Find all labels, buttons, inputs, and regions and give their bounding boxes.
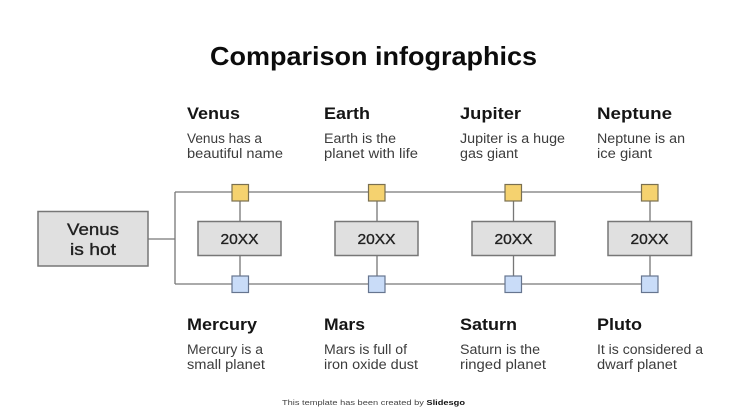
column: Earth: 20XX — [358, 231, 396, 248]
label: Saturn: Saturn is the — [460, 342, 540, 357]
label: Mercury: Mercury — [187, 315, 258, 334]
label: Pluto: It is considered a — [597, 342, 704, 357]
label: Mercury: small planet — [187, 357, 265, 372]
column: Venus: Venus — [187, 104, 240, 123]
column: Neptune: 20XX — [630, 231, 668, 248]
column: Venus: beautiful name — [187, 146, 283, 161]
label: Pluto: dwarf planet — [597, 357, 677, 372]
column: Earth — [324, 104, 418, 292]
label: Mars — [324, 315, 418, 372]
column: Earth: planet with life — [324, 146, 418, 161]
label: Saturn: ringed planet — [460, 357, 546, 372]
label: Mars: Mars — [324, 315, 365, 334]
column: Jupiter: Jupiter — [460, 104, 521, 123]
column: Neptune: Neptune — [597, 104, 672, 123]
title: Comparison infographics — [210, 41, 537, 71]
label: Saturn — [460, 315, 546, 372]
column: Venus — [187, 104, 283, 292]
column: Neptune: ice giant — [597, 146, 652, 161]
column: Neptune — [597, 104, 692, 292]
connector network — [148, 192, 650, 284]
column: Venus: Venus has a — [187, 131, 262, 146]
column: Jupiter: 20XX — [494, 231, 532, 248]
label: Mercury: Mercury is a — [187, 342, 264, 357]
label: Mars: iron oxide dust — [324, 357, 418, 372]
footer credit: This template has been created by Slidesgo — [282, 398, 466, 407]
column: Venus: 20XX — [220, 231, 258, 248]
column: Jupiter — [460, 104, 565, 292]
label: Mars: Mars is full of — [324, 342, 407, 357]
main box: Venus is hot — [38, 212, 148, 266]
label: Pluto — [597, 315, 704, 372]
column: Jupiter: gas giant — [460, 146, 518, 161]
column: Neptune: Neptune is an — [597, 131, 685, 146]
label: Pluto: Pluto — [597, 315, 642, 334]
column: Earth: Earth is the — [324, 131, 396, 146]
column: Earth: Earth — [324, 104, 370, 123]
label: Mercury — [187, 315, 265, 372]
column: Jupiter: Jupiter is a huge — [460, 131, 565, 146]
label: Saturn: Saturn — [460, 315, 517, 334]
main box: Venus is hot: Venus — [67, 221, 119, 239]
main box: Venus is hot: is hot — [70, 241, 116, 259]
